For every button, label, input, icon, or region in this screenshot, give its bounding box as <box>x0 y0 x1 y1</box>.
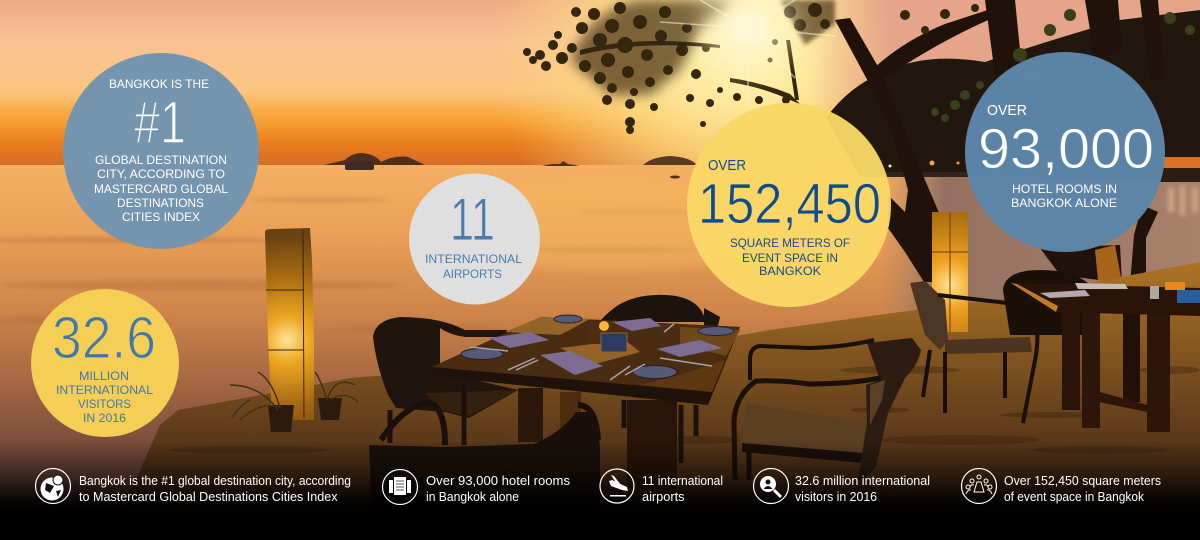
left chair <box>373 317 518 445</box>
stat circle: 11 international airports: AIRPORTS <box>443 267 502 281</box>
stat circle: 93,000 hotel rooms <box>965 52 1165 252</box>
icon: landing plane <box>600 469 634 503</box>
front-left chair <box>369 403 600 520</box>
background: sea <box>0 165 1200 520</box>
icon: magnifier with person <box>754 468 788 504</box>
stat circle: 32.6 million visitors: VISITORS <box>78 397 131 411</box>
main table <box>432 315 740 490</box>
icon: people around a table <box>962 468 996 504</box>
stat circle: #1 global destination: GLOBAL DESTINATION <box>95 153 227 167</box>
islands and boat on the horizon <box>324 153 697 178</box>
stat circle: 152,450 square meters: EVENT SPACE IN <box>742 251 838 265</box>
stat circle: 32.6 million visitors: 32.6 <box>52 305 156 371</box>
candle and card <box>587 321 627 352</box>
footer item: visitors <box>754 468 930 504</box>
bottom dark fade <box>0 440 1200 518</box>
stat circle: #1 global destination: DESTINATIONS <box>117 196 204 210</box>
footer item: event space <box>962 468 1161 504</box>
stat circle: 152,450 square meters: SQUARE METERS OF <box>730 236 850 250</box>
background: sunset sky <box>0 0 1200 166</box>
beach sand <box>118 262 1200 520</box>
stat circle: #1 global destination: #1 <box>134 89 186 156</box>
icon: globe with pin <box>36 468 70 504</box>
right lantern <box>932 212 968 332</box>
stat circle: #1 global destination: MASTERCARD GLOBAL <box>94 182 228 196</box>
tree trunks <box>835 0 1165 285</box>
stat circle: 32.6 million visitors: MILLION <box>79 369 129 383</box>
stat circle: 11 international airports: 11 <box>450 186 495 253</box>
side chair at right table <box>910 281 1037 423</box>
left lantern <box>265 228 314 420</box>
back chair at right table <box>1003 270 1090 335</box>
stat circle: 93,000 hotel rooms: 93,000 <box>978 117 1154 181</box>
stat circle: #1 global destination: BANGKOK IS THE <box>109 77 209 91</box>
stat circle: 32.6 million visitors <box>31 289 179 437</box>
footer item: hotel rooms: in Bangkok alone <box>426 490 519 504</box>
stat circle: 152,450 square meters: OVER <box>708 158 746 174</box>
stat circle: 152,450 square meters: 152,450 <box>698 172 881 236</box>
footer item: destination city <box>36 468 351 504</box>
footer item: airports: 11 international <box>642 474 723 488</box>
stat circle: 11 international airports: INTERNATIONAL <box>425 252 522 266</box>
footer item: visitors: 32.6 million international <box>795 474 930 488</box>
footer item: event space: Over 152,450 square meters <box>1004 474 1161 488</box>
table setting: cutlery <box>470 324 712 380</box>
stat circle: 32.6 million visitors: INTERNATIONAL <box>56 383 153 397</box>
stat circle: 93,000 hotel rooms: BANGKOK ALONE <box>1011 196 1117 210</box>
right table <box>1011 282 1200 432</box>
stat circle: 32.6 million visitors: IN 2016 <box>83 411 126 425</box>
table setting: napkins <box>489 318 722 375</box>
sun flare <box>660 0 835 100</box>
shore lights <box>860 157 1200 216</box>
stat circle: 152,450 square meters <box>687 103 891 307</box>
footer item: hotel rooms <box>382 470 570 504</box>
stat circle: #1 global destination: CITY, ACCORDING TO <box>97 167 225 181</box>
stat circle: #1 global destination <box>63 53 259 249</box>
stat circle: 93,000 hotel rooms: HOTEL ROOMS IN <box>1012 182 1117 196</box>
right foreground chair <box>734 338 921 480</box>
stat circle: 152,450 square meters: BANGKOK <box>759 264 821 278</box>
stat circle: 93,000 hotel rooms: OVER <box>987 103 1027 119</box>
stat circle: 11 international airports <box>409 174 540 304</box>
stat circle: #1 global destination: CITIES INDEX <box>122 210 200 224</box>
table setting: plates <box>461 315 734 378</box>
footer item: visitors: visitors in 2016 <box>795 490 877 504</box>
footer item: airports <box>600 469 723 504</box>
footer item: destination city: to Mastercard Global Destinations Cities Index <box>79 490 338 504</box>
footer item: event space: of event space in Bangkok <box>1004 490 1145 504</box>
tree foliage <box>523 0 979 134</box>
footer item: destination city: Bangkok is the #1 global destination city, according <box>79 474 351 488</box>
icon: hotel building <box>382 470 418 504</box>
back chair at main table <box>599 295 720 463</box>
footer item: airports: airports <box>642 490 684 504</box>
green leaves by the trunks <box>931 9 1195 122</box>
footer item: hotel rooms: Over 93,000 hotel rooms <box>426 474 570 488</box>
forest on the right <box>826 10 1200 182</box>
potted plants beside left lantern <box>230 372 358 432</box>
